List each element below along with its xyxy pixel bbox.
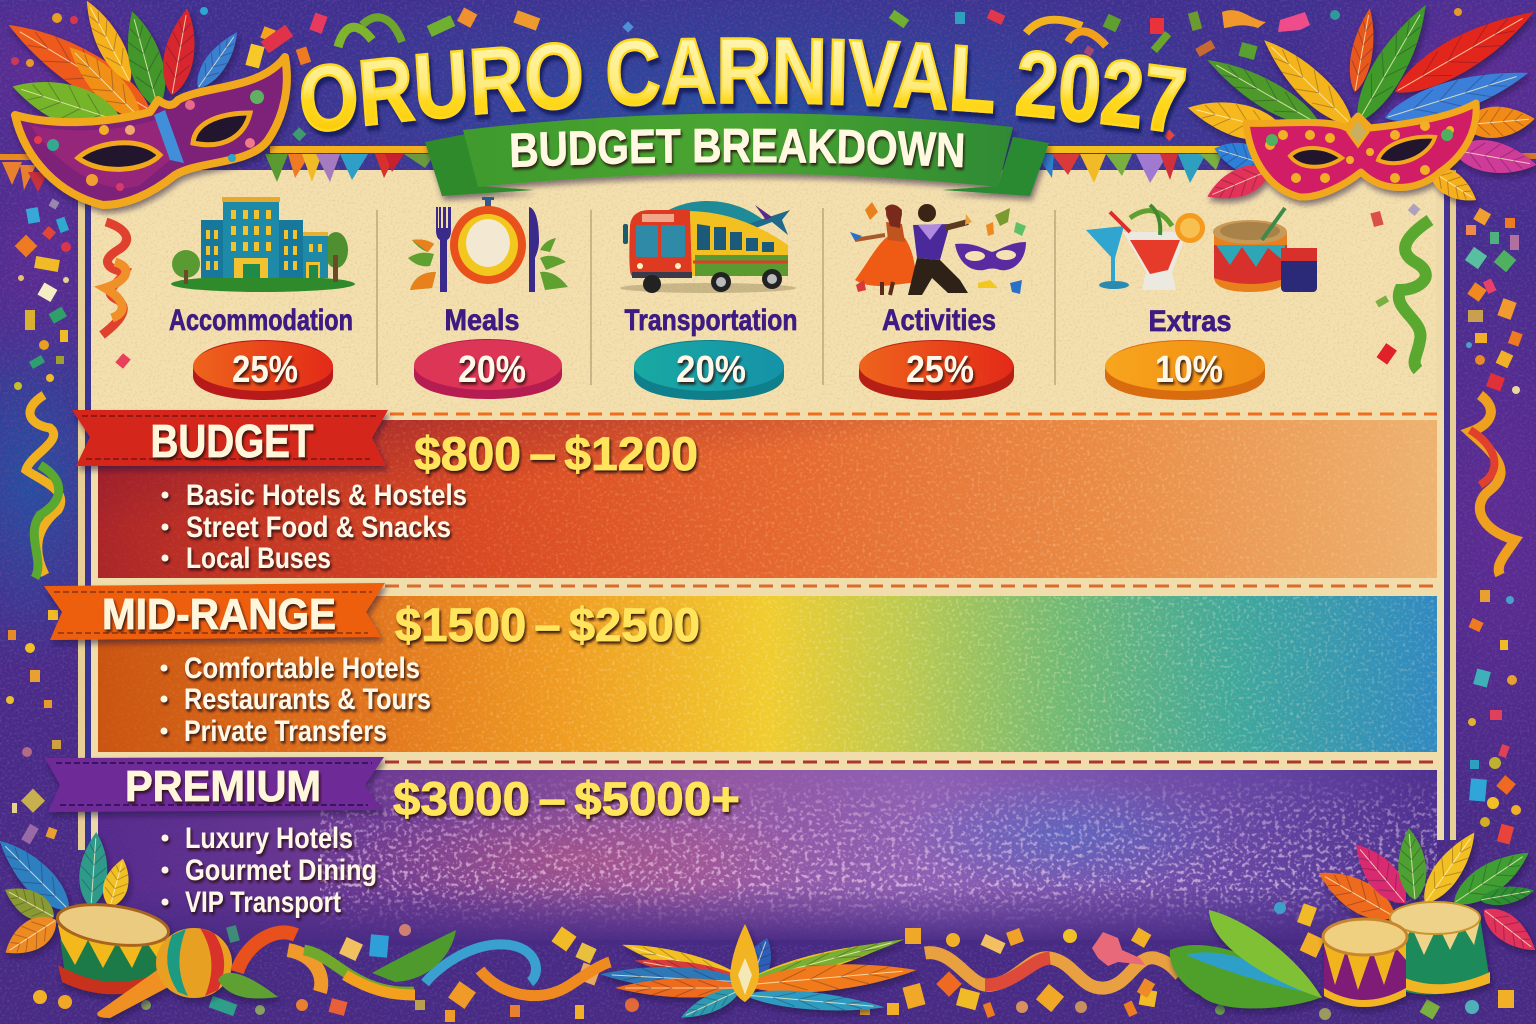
premium ribbon: PREMIUM bbox=[125, 762, 321, 811]
tier: budget: Street Food & Snacks bbox=[186, 511, 451, 544]
tier: budget: Basic Hotels & Hostels bbox=[186, 479, 467, 512]
bottom right feathers and drums bbox=[1311, 825, 1536, 1007]
subtitle ribbon: BUDGET BREAKDOWN bbox=[510, 128, 966, 172]
streamers bbox=[26, 17, 1515, 578]
budget ribbon: BUDGET bbox=[150, 415, 314, 467]
category: meals: Meals bbox=[444, 304, 520, 337]
tier: budget: Local Buses bbox=[186, 542, 331, 575]
category: accommodation: Accommodation bbox=[169, 304, 353, 337]
tier: premium bbox=[45, 757, 740, 919]
category: transportation: 20% bbox=[676, 349, 746, 391]
tier: mid-range bbox=[44, 583, 700, 748]
category: activities: Activities bbox=[882, 304, 996, 337]
dividers bbox=[377, 208, 1055, 385]
tier: mid-range: Restaurants & Tours bbox=[184, 683, 431, 716]
category: accommodation bbox=[169, 304, 353, 400]
tier: budget: $800 – $1200 bbox=[414, 427, 698, 480]
left mask with feathers bbox=[0, 0, 287, 205]
tier: budget bbox=[72, 410, 698, 575]
category: extras bbox=[1105, 305, 1265, 400]
category: extras: 10% bbox=[1155, 349, 1223, 391]
tier: premium: $3000 – $5000+ bbox=[393, 772, 740, 825]
mid-range ribbon bbox=[44, 583, 385, 640]
bunting bbox=[0, 146, 1536, 192]
panel: parchment bbox=[91, 170, 1436, 415]
bottom left: feathers, drum, maraca bbox=[0, 830, 278, 1018]
category: transportation: Transportation bbox=[624, 304, 798, 337]
row: budget background bbox=[91, 410, 1444, 585]
tier: premium: Gourmet Dining bbox=[185, 854, 377, 887]
tier: mid-range: Private Transfers bbox=[184, 715, 387, 748]
premium ribbon bbox=[45, 757, 384, 812]
row: mid-range background bbox=[91, 578, 1444, 760]
budget ribbon bbox=[72, 410, 388, 467]
category: meals: 20% bbox=[458, 349, 526, 391]
category: transportation bbox=[624, 304, 798, 400]
bottom leaf bbox=[372, 930, 456, 982]
frame lines bbox=[78, 170, 1456, 850]
title: ORURO CARNIVAL 2027 bbox=[301, 37, 1190, 138]
subtitle ribbon bbox=[424, 113, 1054, 204]
icon: hotel bbox=[171, 197, 355, 292]
bottom right leaves bbox=[1170, 910, 1322, 1008]
icon: meals bbox=[408, 197, 568, 292]
tier: mid-range: Comfortable Hotels bbox=[184, 652, 420, 685]
category: activities bbox=[859, 304, 1014, 400]
right mask with feathers bbox=[1184, 0, 1536, 210]
tier: mid-range: $1500 – $2500 bbox=[395, 598, 700, 651]
bottom ribbons bbox=[237, 932, 1180, 996]
mid-range ribbon: MID-RANGE bbox=[102, 590, 336, 639]
icon: bus and plane bbox=[620, 201, 796, 293]
category: accommodation: 25% bbox=[232, 349, 298, 391]
tier: premium: Luxury Hotels bbox=[185, 822, 353, 855]
splash bbox=[1092, 932, 1145, 966]
tier: premium: VIP Transport bbox=[185, 886, 341, 919]
category: meals bbox=[414, 304, 562, 399]
category: activities: 25% bbox=[906, 349, 974, 391]
icon: drinks and drum bbox=[1086, 205, 1317, 292]
category: extras: Extras bbox=[1148, 305, 1232, 338]
row: premium background bbox=[0, 760, 1536, 945]
icon: dancers bbox=[850, 202, 1026, 295]
bottom centre feathers bbox=[600, 924, 917, 1024]
